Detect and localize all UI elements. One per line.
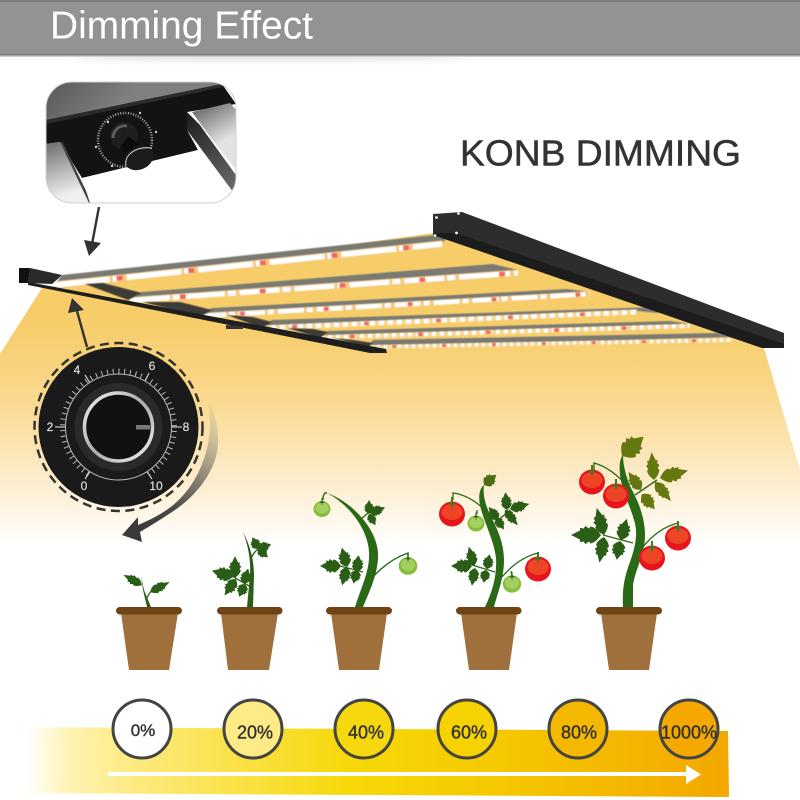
pot 4 <box>456 607 522 670</box>
marker 0%: 0% <box>131 721 155 740</box>
dial: 10 <box>149 479 163 493</box>
percent markers <box>113 700 718 758</box>
marker 80%: 80% <box>561 722 597 742</box>
inset photo of knob <box>46 82 236 203</box>
dial: 0 <box>81 479 88 493</box>
dial <box>34 343 202 511</box>
pot 2 <box>217 607 282 670</box>
bar 4 <box>262 307 658 328</box>
arrow: dial to rail <box>68 298 87 347</box>
marker 60% <box>438 700 496 758</box>
plant 3: green fruit <box>314 493 417 670</box>
bar 2 <box>130 264 518 300</box>
marker 80% <box>549 700 607 758</box>
header bar <box>0 0 800 61</box>
dial: 2 <box>47 420 54 434</box>
dial: 4 <box>74 363 81 377</box>
marker 0% <box>113 700 171 758</box>
bar 5 <box>318 321 690 338</box>
marker 20% <box>224 700 282 758</box>
arrow: inset to light <box>84 207 101 256</box>
pot 1 <box>116 607 182 670</box>
bar 3 <box>200 289 590 316</box>
plant 4: ripening fruit <box>439 470 551 670</box>
bar 1 <box>55 234 445 285</box>
dial: 6 <box>149 359 156 373</box>
marker 1000% <box>660 700 718 758</box>
heading: Dimming Effect: Dimming Effect <box>50 4 313 48</box>
heading: KONB DIMMING: KONB DIMMING <box>460 132 741 174</box>
plant 2: young plant <box>210 532 282 670</box>
marker 40%: 40% <box>348 722 384 742</box>
curved rotation arrow <box>122 402 218 542</box>
pot 5 <box>596 607 662 670</box>
bar 6 <box>368 333 733 347</box>
marker 60%: 60% <box>451 722 487 742</box>
plant 5: full grown <box>571 429 691 670</box>
marker 1000%: 1000% <box>661 722 717 742</box>
progress band <box>15 727 729 797</box>
plant 1: seedling <box>116 571 182 670</box>
white progress arrow <box>108 765 701 784</box>
right housing <box>433 212 784 348</box>
pot 3 <box>326 607 392 670</box>
marker 40% <box>335 700 393 758</box>
dial: 8 <box>183 420 190 434</box>
left rail <box>19 268 387 353</box>
marker 20%: 20% <box>237 722 273 742</box>
LED light fixture <box>19 212 784 353</box>
light beam <box>0 233 800 560</box>
